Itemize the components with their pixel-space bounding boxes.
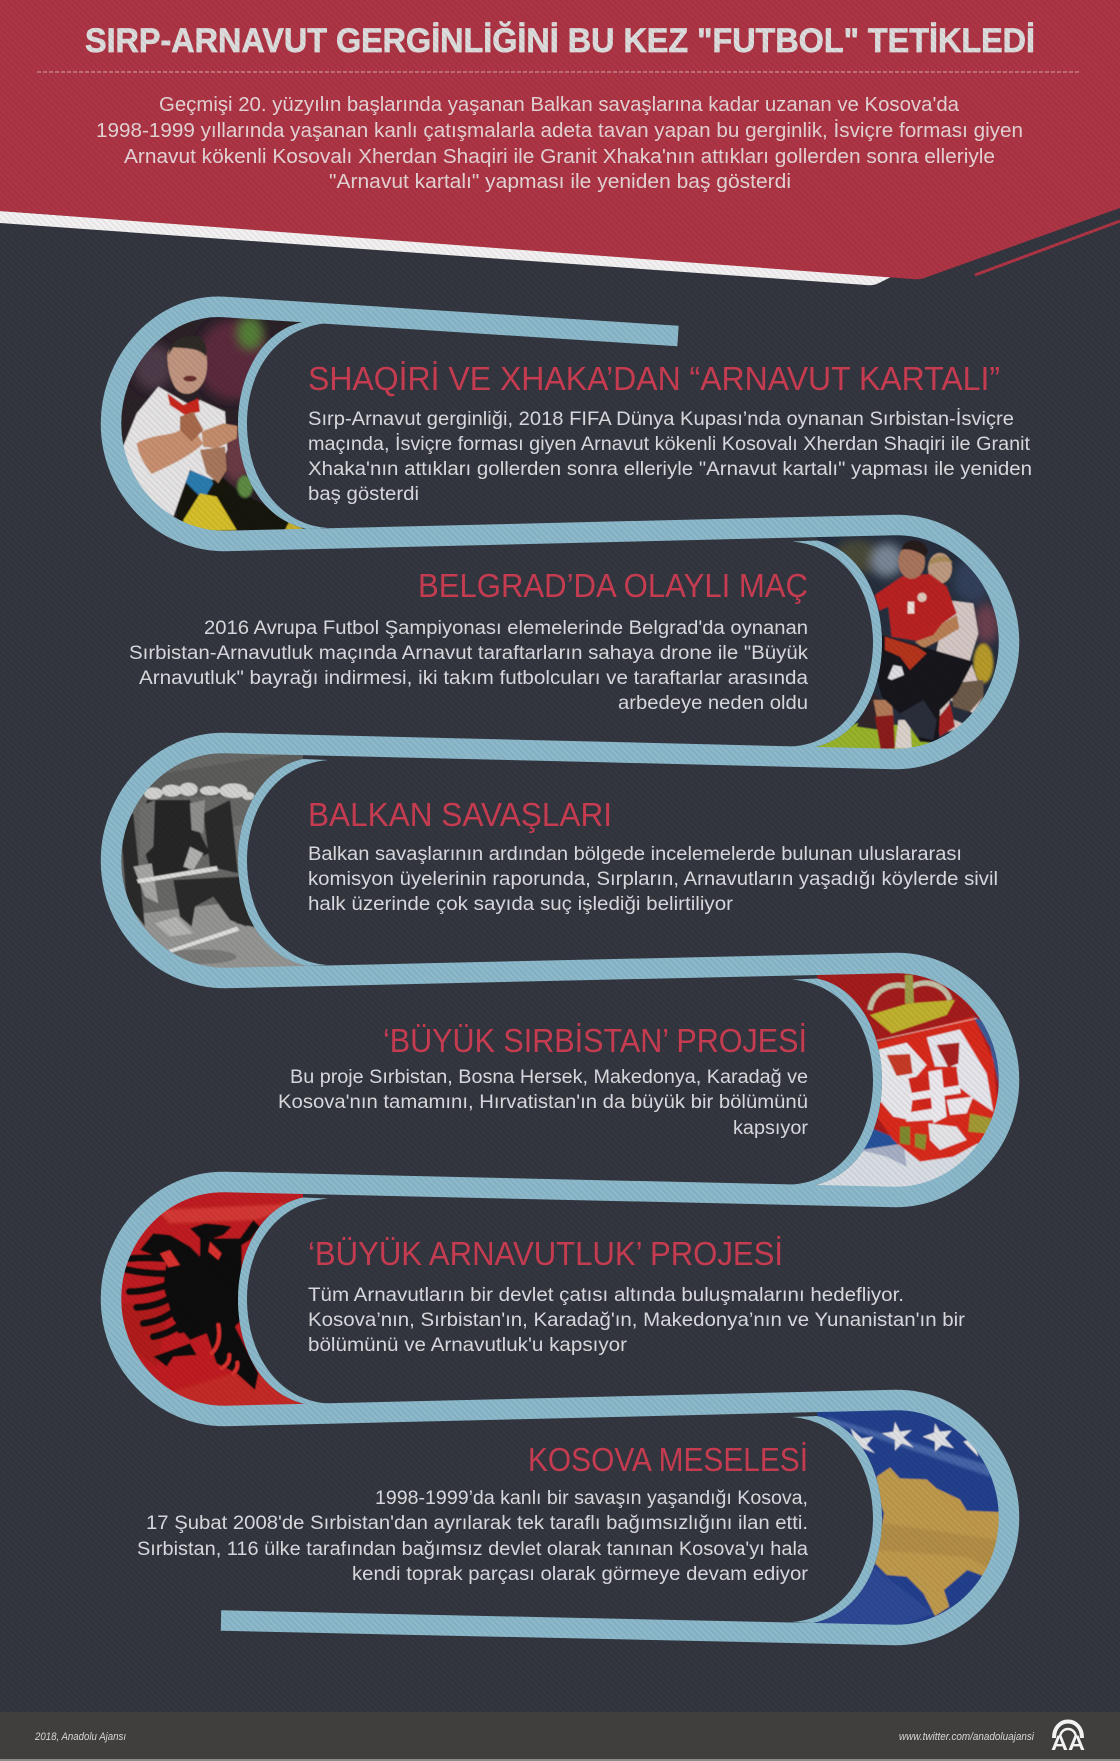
footer	[0, 1712, 1120, 1761]
panel 6 heading: KOSOVA MESELESİ	[528, 1441, 808, 1478]
panel 5 body	[308, 1285, 966, 1356]
panel 3 body: Balkan savaşlarının ardından bölgede incelemelerde bulunan uluslararası	[308, 844, 962, 865]
panel 4 text	[278, 1022, 809, 1139]
panel 6 text	[137, 1441, 809, 1585]
panel 3 inner curve	[238, 759, 328, 966]
panel 1 heading: SHAQİRİ VE XHAKA’DAN “ARNAVUT KARTALI”	[308, 360, 1000, 397]
panel 3 body	[308, 844, 998, 915]
panel 2 body: arbedeye neden oldu	[618, 693, 808, 714]
serpentine band	[111, 307, 1009, 1635]
intro text: Geçmişi 20. yüzyılın başlarında yaşanan Balkan savaşlarına kadar uzanan ve Kosova'da	[159, 94, 960, 116]
panel 5 body: Tüm Arnavutların bir devlet çatısı altında buluşmalarını hedefliyor.	[308, 1285, 904, 1306]
photo: Kosovo flag	[814, 1410, 999, 1625]
panel 1 inner curve	[238, 322, 328, 529]
panel 3 heading: BALKAN SAVAŞLARI	[308, 796, 612, 833]
panel 6 inner curve	[792, 1416, 882, 1623]
panel 6 body: 17 Şubat 2008'de Sırbistan'dan ayrılarak tek taraflı bağımsızlığını ilan etti.	[146, 1513, 808, 1534]
panel 4 body	[278, 1067, 809, 1139]
title: SIRP-ARNAVUT GERGİNLİĞİNİ BU KEZ "FUTBOL" TETİKLEDİ	[85, 22, 1035, 60]
panel 2 body: Sırbistan-Arnavutluk maçında Arnavut taraftarların sahaya drone ile "Büyük	[129, 643, 809, 664]
icon: AA logo: AA	[1051, 1732, 1085, 1755]
panel 6 body	[137, 1488, 809, 1585]
panel 1 body	[308, 409, 1032, 505]
panel 1 text	[308, 360, 1032, 505]
icon: AA logo	[1051, 1722, 1085, 1755]
panel 4 body: Kosova'nın tamamını, Hırvatistan'ın da büyük bir bölümünü	[278, 1092, 808, 1113]
intro text: 1998-1999 yıllarında yaşanan kanlı çatışmalarla adeta tavan yapan bu gerginlik, İsviçre forması giyen	[96, 119, 1023, 142]
panel 3 body: komisyon üyelerinin raporunda, Sırpların, Arnavutların yaşadığı köylerde sivil	[308, 869, 998, 890]
header banner	[0, 0, 1120, 285]
panel 2 body: Arnavutluk" bayrağı indirmesi, iki takım futbolcuları ve taraftarlar arasında	[139, 668, 808, 689]
panel 6 body: Sırbistan, 116 ülke tarafından bağımsız devlet olarak tanınan Kosova'yı hala	[137, 1539, 808, 1560]
photo: Xhaka eagle gesture	[121, 317, 306, 531]
panel 5 inner curve	[238, 1198, 328, 1404]
footer link: www.twitter.com/anadoluajansi	[899, 1731, 1034, 1743]
panel 2 inner curve	[792, 540, 882, 748]
panel 5 body: bölümünü ve Arnavutluk'u kapsıyor	[308, 1335, 628, 1356]
panel 4 inner curve	[792, 978, 882, 1186]
panel 1 body: Sırp-Arnavut gerginliği, 2018 FIFA Dünya Kupası’nda oynanan Sırbistan-İsviçre	[308, 409, 1014, 430]
photo: Belgrade match	[816, 536, 998, 749]
panel 2 body: 2016 Avrupa Futbol Şampiyonası elemelerinde Belgrad'da oynanan	[204, 618, 808, 639]
photo: Serbian flag	[816, 973, 999, 1187]
panel 5 heading: ‘BÜYÜK ARNAVUTLUK’ PROJESİ	[308, 1235, 783, 1272]
panel 2 heading: BELGRAD’DA OLAYLI MAÇ	[418, 567, 808, 604]
panel 5 text	[308, 1235, 966, 1356]
panel 6 body: kendi toprak parçası olarak görmeye devam ediyor	[352, 1564, 809, 1585]
panel 4 body: kapsıyor	[733, 1118, 809, 1139]
panel 5 body: Kosova’nın, Sırbistan'ın, Karadağ'ın, Makedonya’nın ve Yunanistan'ın bir	[308, 1310, 966, 1331]
panel 1 body: Xhaka'nın attıkları gollerden sonra elleriyle "Arnavut kartalı" yapması ile yeniden	[308, 459, 1032, 480]
panel 3 body: halk üzerinde çok sayıda suç işlediği belirtiliyor	[308, 894, 734, 915]
panel 4 body: Bu proje Sırbistan, Bosna Hersek, Makedonya, Karadağ ve	[290, 1067, 808, 1088]
panel 2 body	[129, 618, 809, 714]
panel 1 body: maçında, İsviçre forması giyen Arnavut kökenli Kosovalı Xherdan Shaqiri ile Granit	[308, 434, 1031, 455]
panel 2 text	[129, 567, 809, 714]
footer credit: 2018, Anadolu Ajansı	[34, 1731, 126, 1743]
photo: Balkan wars soldiers	[121, 753, 306, 968]
intro text: "Arnavut kartalı" yapması ile yeniden baş gösterdi	[329, 171, 791, 193]
panel 3 text	[308, 796, 998, 915]
intro text: Arnavut kökenli Kosovalı Xherdan Shaqiri ile Granit Xhaka'nın attıkları gollerden sonra elleriyle	[124, 146, 995, 168]
panel 1 body: baş gösterdi	[308, 484, 419, 505]
panel 4 heading: ‘BÜYÜK SIRBİSTAN’ PROJESİ	[383, 1022, 807, 1059]
panel 6 body: 1998-1999’da kanlı bir savaşın yaşandığı Kosova,	[375, 1488, 808, 1509]
intro text	[96, 94, 1023, 193]
photo: Albanian flag	[121, 1192, 304, 1406]
